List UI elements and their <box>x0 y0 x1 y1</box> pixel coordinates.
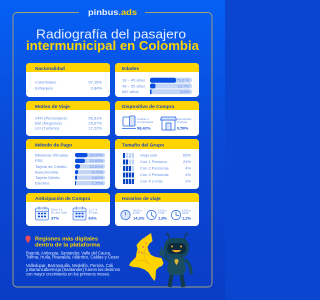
panel: horarios de viaje: 12:00 a <box>158 208 167 212</box>
panel: edades: 10,7% <box>178 83 189 88</box>
panel: anticipación de compra: Anticipación de Compra <box>35 196 91 202</box>
panel: método de pago: 4,51% <box>92 175 103 180</box>
panel: método de pago: PSE <box>35 158 43 163</box>
panel: método de pago: Billeteras Virtuales <box>35 152 68 158</box>
panel: motivo de viaje <box>26 101 110 136</box>
heading: regiones: Regiones más digitales <box>35 236 98 242</box>
background <box>0 0 225 300</box>
panel: método de pago: Tarjeta Débito <box>35 175 60 180</box>
panel: edades: 3,6% <box>180 89 189 94</box>
text block: regiones: Tolima, Huila, Risaralda, Atlántico, Caldas y Cesar <box>26 254 120 260</box>
panel: horarios de viaje: 11:59 <box>133 211 140 215</box>
panel: tamaño del grupo: Viajo solo <box>140 152 158 158</box>
panel: nacionalidad: Extranjero <box>35 86 54 90</box>
panel: edades: 18 – 45 años <box>122 78 145 82</box>
panel: motivo de viaje: VFR (Personales) <box>35 116 67 120</box>
text block: regiones: con mayor crecimiento en los primeros meses. <box>26 272 110 276</box>
logo: pinbus .ads <box>88 8 137 17</box>
panel: dispositivo de compra: 98,42% <box>137 126 151 130</box>
panel: nacionalidad: Nacionalidad <box>35 66 65 72</box>
text block: regiones <box>26 250 120 276</box>
title: Radiografía del pasajero <box>36 26 186 42</box>
panel: método de pago: Bancolombia <box>35 170 59 174</box>
panel: horarios de viaje <box>115 193 199 226</box>
heading: regiones <box>35 236 101 248</box>
panel: nacionalidad: 97,16% <box>88 80 102 84</box>
panel: anticipación de compra: 63% <box>88 216 97 220</box>
text block: regiones: y Barrancabermeja (Santander) fueron los destinos <box>26 267 120 272</box>
panel: anticipación de compra: 1 a 7 a <box>88 208 97 212</box>
panel: edades: Edades <box>122 66 139 72</box>
panel: dispositivo de compra: Celular o <box>137 117 149 121</box>
panel: método de pago: Método de Pago <box>35 142 72 148</box>
panel: tamaño del grupo: Con 2 Personas <box>140 166 169 170</box>
icon: calendar <box>73 206 86 220</box>
panel: tamaño del grupo: Con 3 Personas <box>140 172 169 177</box>
panel: horarios de viaje: 14,3% <box>133 216 145 220</box>
icon: location pin <box>25 236 31 243</box>
icon: clock <box>147 210 156 220</box>
icon: calendar <box>36 206 48 220</box>
panel: edades: 75,6 % <box>177 78 189 82</box>
icon: store <box>160 117 176 130</box>
frame <box>13 12 212 287</box>
panel: tamaño del grupo: Con 1 Persona <box>140 159 167 164</box>
panel: dispositivo de compra: Computador <box>137 120 154 124</box>
panel: edades: 46 – 55 años <box>122 83 145 88</box>
panel: dispositivo de compra: Propias <box>177 120 188 124</box>
panel: método de pago: 1,75% <box>92 180 103 186</box>
panel: anticipación de compra: 30 días <box>88 210 98 214</box>
panel: motivo de viaje: 25,97% <box>88 120 102 126</box>
panel: nacionalidad: Colombiano <box>35 80 57 84</box>
text block: regiones: Valledupar, Barranquilla, Medellín, Pereira, Cali <box>26 263 113 268</box>
panel: tamaño del grupo: Con 4 o más <box>140 178 163 184</box>
panel: método de pago: Tarjeta de Crédito <box>35 164 67 169</box>
panel: horarios de viaje: 17:59 <box>158 211 165 215</box>
icon: robot mascot <box>160 233 191 287</box>
panel: anticipación de compra <box>26 193 110 226</box>
panel: horarios de viaje: 1,2% <box>182 216 192 220</box>
icon: laptop and phone <box>122 116 136 128</box>
map: Colombia <box>129 233 164 281</box>
panel: edades <box>115 63 199 97</box>
panel: tamaño del grupo <box>115 139 199 189</box>
panel: edades: 56+ años <box>122 89 139 94</box>
panel: motivo de viaje: 17,22% <box>88 126 102 130</box>
panel: horarios de viaje: Horarios de viaje <box>122 196 161 202</box>
panel: método de pago: 39,09% <box>89 152 103 158</box>
panel: tamaño del grupo: 2% <box>185 178 191 184</box>
text block: regiones: Bogotá, Antioquia, Santander, Valle del Cauca, <box>26 250 111 256</box>
panel: tamaño del grupo: 4% <box>185 172 191 177</box>
panel: horarios de viaje: 18:00 a <box>182 208 191 212</box>
panel: nacionalidad: 2,84% <box>91 86 102 90</box>
panel: método de pago: Efectivo <box>35 180 50 186</box>
panel: anticipación de compra: Entre 1 a <box>51 208 63 212</box>
panel: tamaño del grupo: Tamaño del Grupo <box>122 142 164 148</box>
panel: dispositivo de compra <box>115 101 199 136</box>
heading: regiones: dentro de la plataforma <box>35 242 101 248</box>
panel: dispositivo de compra: Ventanillas <box>177 117 192 121</box>
panel: tamaño del grupo: 4% <box>185 166 191 170</box>
icon: people rows <box>123 152 134 185</box>
panel: anticipación de compra: 30 días Viaje <box>51 210 68 214</box>
title <box>26 26 200 53</box>
icon: clock <box>121 210 130 220</box>
panel: método de pago <box>26 139 110 189</box>
panel: tamaño del grupo: 24% <box>183 159 191 164</box>
panel: horarios de viaje: 1,8% <box>158 216 168 220</box>
icon: clock <box>171 210 181 220</box>
panel: método de pago: 12,81% <box>89 164 103 169</box>
title: intermunicipal en Colombia <box>26 38 200 53</box>
panel: motivo de viaje: Motivo de Viaje <box>35 104 70 110</box>
panel: motivo de viaje: BIZ (Negocios) <box>35 120 62 126</box>
panel: horarios de viaje: 23:59 <box>182 211 189 215</box>
panel: tamaño del grupo: 66% <box>183 152 191 158</box>
panel: método de pago: 8,75% <box>92 170 103 174</box>
panel: método de pago: 32,65% <box>89 158 103 163</box>
panel: motivo de viaje: LEI (Turismo) <box>35 126 60 130</box>
panel: anticipación de compra: 37% <box>51 216 59 220</box>
panel: dispositivo de compra: Dispositivo de Compra <box>122 104 175 110</box>
panel: horarios de viaje: 00:00 a <box>133 208 142 212</box>
panel: motivo de viaje: 56,81% <box>88 116 102 120</box>
panel: nacionalidad <box>26 63 110 97</box>
panel: dispositivo de compra: 0,59% <box>177 126 189 130</box>
